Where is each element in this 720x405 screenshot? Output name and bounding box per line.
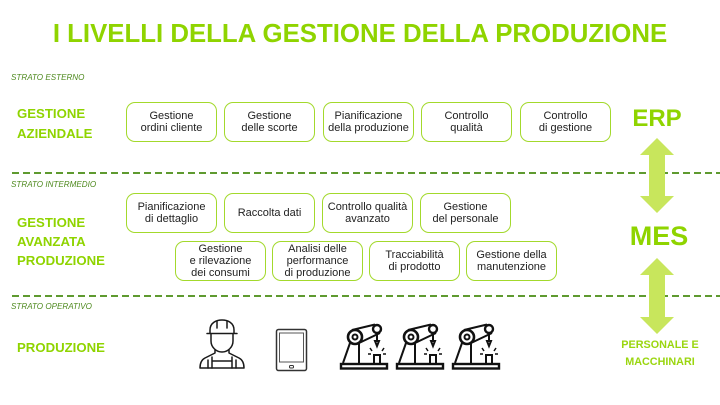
box: tracciabilità di prodotto: Tracciabilità (385, 249, 444, 261)
box: pianificazione di dettaglio: Pianificazione (138, 201, 205, 213)
box: controllo di gestione: di gestione (539, 122, 592, 134)
title: I LIVELLI DELLA GESTIONE DELLA PRODUZIONE (53, 20, 667, 48)
icon: robot arm 1 (340, 324, 388, 370)
label: MES: MES (630, 221, 688, 251)
box: gestione delle scorte (224, 102, 315, 142)
box: controllo qualità avanzato: Controllo qualità (328, 201, 407, 213)
heading: gestione avanzata produzione: GESTIONE (17, 215, 85, 230)
box: raccolta dati: Raccolta dati (238, 207, 301, 219)
box: analisi delle performance di produzione: Analisi delle (288, 243, 347, 255)
box: controllo qualità: qualità (450, 122, 483, 134)
box: gestione della manutenzione: Gestione della (476, 249, 547, 261)
heading: gestione aziendale: AZIENDALE (17, 126, 92, 141)
box: gestione della manutenzione: manutenzione (477, 261, 546, 273)
heading: gestione avanzata produzione: AVANZATA (17, 234, 86, 249)
box: gestione del personale: Gestione (443, 201, 488, 213)
icon: tablet (276, 328, 308, 372)
layer label: strato esterno: STRATO ESTERNO (11, 73, 84, 82)
box: gestione della manutenzione (466, 241, 557, 281)
icon: robot arm 3 (452, 324, 500, 370)
arrow: MES to personale e macchinari (640, 258, 674, 334)
box: controllo qualità (421, 102, 512, 142)
label: personale e macchinari: MACCHINARI (625, 356, 695, 368)
heading: gestione aziendale (17, 106, 92, 141)
box: tracciabilità di prodotto (369, 241, 460, 281)
box: pianificazione di dettaglio (126, 193, 217, 233)
box: pianificazione di dettaglio: di dettaglio (145, 213, 198, 225)
box: pianificazione della produzione (323, 102, 414, 142)
box: gestione e rilevazione dei consumi: Gestione (198, 243, 242, 255)
box: controllo di gestione: Controllo (543, 110, 588, 122)
heading: gestione avanzata produzione: PRODUZIONE (17, 253, 105, 268)
box: gestione e rilevazione dei consumi: e rilevazione (190, 255, 251, 267)
box: pianificazione della produzione: della produzione (328, 122, 409, 134)
layer label: strato intermedio: STRATO INTERMEDIO (11, 180, 96, 189)
box: controllo qualità avanzato (322, 193, 413, 233)
box: gestione e rilevazione dei consumi (175, 241, 266, 281)
box: gestione ordini cliente: Gestione (149, 110, 194, 122)
icon: worker with helmet (199, 319, 245, 369)
label: personale e macchinari (621, 339, 699, 368)
box: controllo qualità avanzato: avanzato (345, 213, 390, 225)
box: tracciabilità di prodotto: di prodotto (388, 261, 440, 273)
box: gestione ordini cliente: ordini cliente (141, 122, 202, 134)
label: ERP: ERP (632, 105, 682, 132)
box: pianificazione della produzione: Pianificazione (335, 110, 402, 122)
heading: gestione avanzata produzione (17, 215, 105, 268)
box: gestione delle scorte: Gestione (247, 110, 292, 122)
box: analisi delle performance di produzione: di produzione (284, 267, 351, 279)
layer label: strato operativo: STRATO OPERATIVO (11, 302, 92, 311)
box: gestione ordini cliente (126, 102, 217, 142)
box: gestione del personale (420, 193, 511, 233)
box: controllo di gestione (520, 102, 611, 142)
box: gestione e rilevazione dei consumi: dei consumi (191, 267, 250, 279)
box: raccolta dati (224, 193, 315, 233)
box: analisi delle performance di produzione: performance (287, 255, 348, 267)
heading: produzione: PRODUZIONE (17, 340, 105, 355)
box: analisi delle performance di produzione (272, 241, 363, 281)
box: controllo qualità: Controllo (444, 110, 489, 122)
box: gestione del personale: del personale (432, 213, 499, 225)
icon: robot arm 2 (396, 324, 444, 370)
arrow: ERP to MES (640, 138, 674, 213)
heading: gestione aziendale: GESTIONE (17, 106, 85, 121)
box: gestione delle scorte: delle scorte (241, 122, 298, 134)
label: personale e macchinari: PERSONALE E (621, 339, 699, 351)
